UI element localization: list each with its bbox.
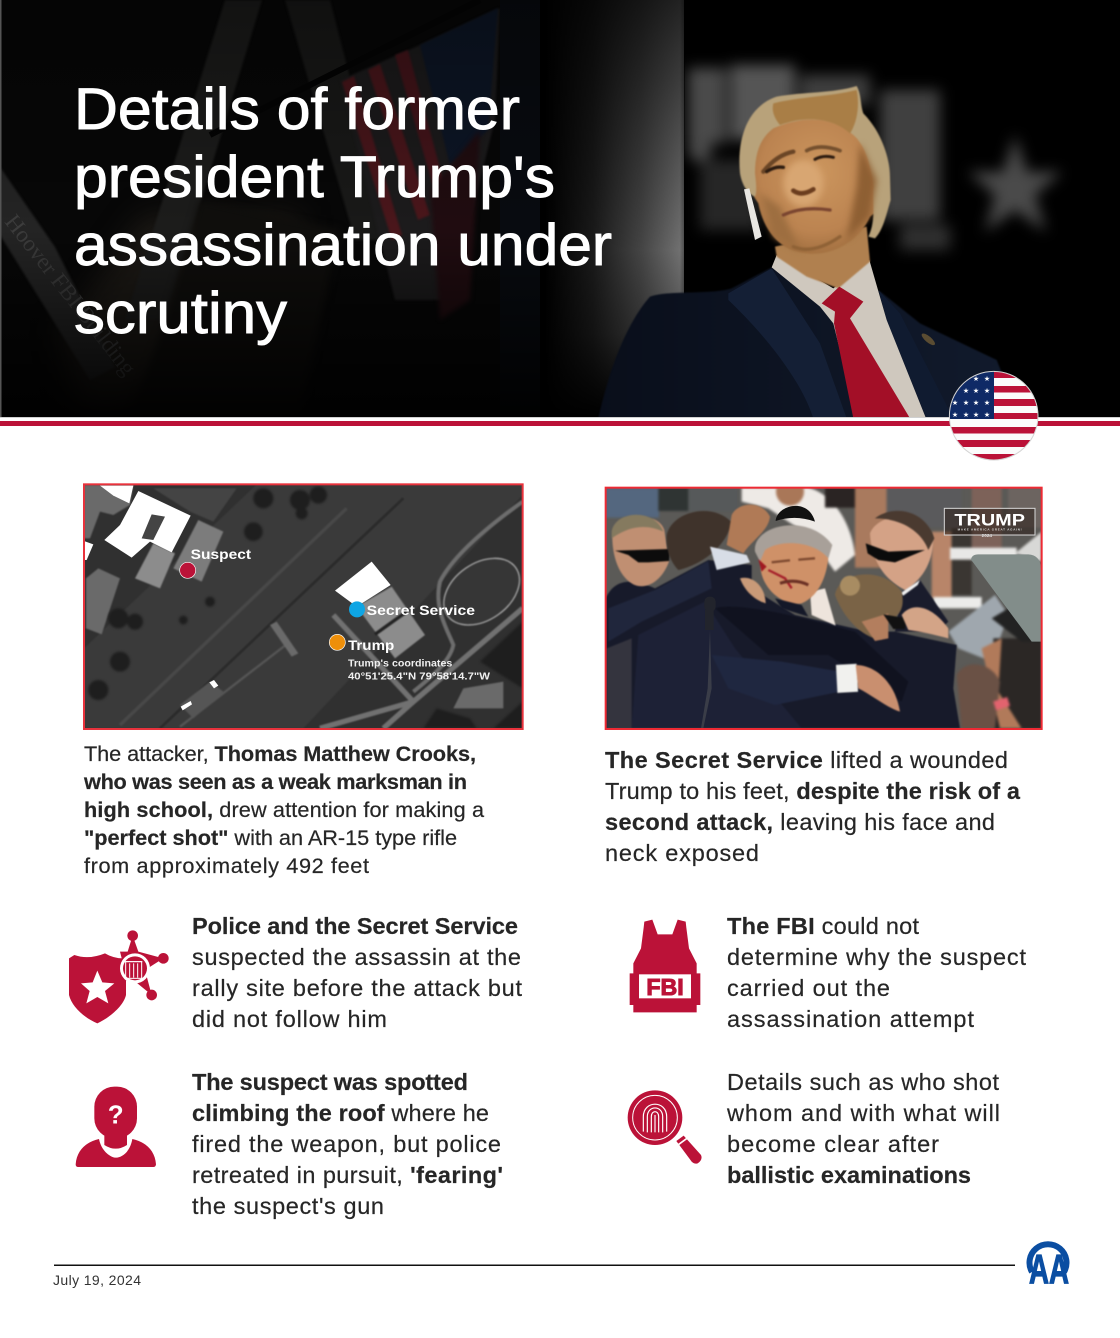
icon: FBI vest: FBI: [646, 974, 684, 1000]
icon: US flag: ★: [952, 399, 958, 407]
title: assassination under: [74, 213, 612, 278]
text block: police: Police and the Secret Service: [192, 913, 518, 939]
left agent head: [612, 515, 670, 586]
black hat behind head: [776, 506, 815, 522]
date: July 19, 2024: [53, 1272, 141, 1288]
marker: suspect: [180, 547, 252, 578]
figure: former president Trump: [598, 86, 1020, 418]
icon: US flag: ★: [973, 375, 979, 383]
text block: attacker: [83, 741, 485, 878]
text block: FBI: carried out the: [727, 975, 890, 1001]
microphone: [701, 597, 716, 728]
campaign logo: 2024: [982, 533, 992, 538]
text block: suspect spotted: climbing the roof where he: [192, 1100, 489, 1126]
logo: Anadolu Agency: [1029, 1244, 1069, 1292]
icon: US flag: ★: [973, 411, 979, 419]
text block: secret service: second attack, leaving his face and: [605, 809, 995, 835]
brows, eyes, nose and mouth: [763, 147, 840, 249]
panel: rally photo: [606, 478, 1042, 729]
facial shading: [760, 143, 877, 252]
text block: ballistic: ballistic examinations: [727, 1162, 971, 1188]
icon: suspect silhouette with question mark: ?: [108, 1099, 124, 1129]
text block: police: suspected the assassin at the: [192, 944, 521, 970]
building and flag backdrop: Hoover FBI Building: [0, 210, 141, 381]
text block: secret service: The Secret Service lifted a wounded: [605, 747, 1008, 773]
crowd background: [606, 478, 1042, 729]
text block: suspect spotted: The suspect was spotted: [192, 1069, 468, 1095]
icon: US flag: ★: [984, 399, 990, 407]
tie: [822, 287, 910, 418]
text block: ballistic: [726, 1069, 1000, 1188]
icon: US flag: ★: [984, 375, 990, 383]
marker: secret service: Secret Service: [367, 603, 475, 618]
second agent head and raised fist: [667, 505, 770, 570]
campaign logo: TRUMP: [954, 511, 1025, 530]
marker: Trump and coordinates: Trump's coordinates: [348, 658, 453, 669]
text block: ballistic: whom and with what will: [726, 1100, 1000, 1126]
text block: suspect spotted: the suspect's gun: [192, 1193, 384, 1219]
hair: [739, 86, 891, 238]
text block: suspect spotted: retreated in pursuit, 'fearing': [192, 1162, 503, 1188]
campaign logo: MAKE AMERICA GREAT AGAIN!: [958, 528, 1022, 532]
icon: US flag: ★: [973, 387, 979, 395]
building and flag backdrop: [0, 0, 540, 417]
neck: [775, 227, 870, 288]
marker: Trump and coordinates: 40°51'25.4"N 79°58'14.7"W: [348, 671, 491, 682]
title: scrutiny: [74, 281, 287, 346]
shirt collar: [772, 255, 926, 418]
text block: attacker: high school, drew attention for making a: [84, 797, 485, 822]
head: [739, 86, 891, 254]
icon: US flag: ★: [984, 387, 990, 395]
title: [74, 77, 612, 346]
lapel: [728, 268, 847, 418]
red divider band: [0, 417, 1120, 426]
text block: FBI: assassination attempt: [727, 1006, 974, 1032]
map ground texture and roads: [84, 484, 532, 728]
grey column: [560, 0, 685, 388]
icon: US flag: ★: [973, 399, 979, 407]
text block: FBI: [727, 913, 1026, 1032]
text block: secret service: Trump to his feet, despite the risk of a: [605, 778, 1021, 804]
icon: US flag: ★: [984, 411, 990, 419]
text block: attacker: who was seen as a weak marksman in: [83, 769, 467, 794]
icon: US flag: ★: [963, 411, 969, 419]
icon: US flag: ★: [963, 387, 969, 395]
footer rule: [54, 1264, 1015, 1266]
icon: suspect silhouette with question mark: [76, 1087, 156, 1167]
title: president Trump's: [74, 145, 555, 210]
suit: [598, 267, 1020, 418]
icon: magnifier with fingerprint: [628, 1090, 702, 1164]
marker: Trump and coordinates: Trump: [348, 638, 394, 653]
right agent head: [866, 511, 934, 596]
ear bandage: [744, 188, 762, 240]
icon: US flag: ★: [952, 411, 958, 419]
text block: FBI: determine why the suspect: [727, 944, 1026, 970]
agents in dark suits: [606, 560, 960, 728]
icon: police shield and sheriff star: [69, 930, 169, 1023]
text block: police: rally site before the attack but: [192, 975, 522, 1001]
title: Details of former: [74, 77, 520, 142]
header photo banner: [0, 0, 1120, 418]
text block: FBI: The FBI could not: [727, 913, 919, 939]
icon: US flag: ★: [963, 399, 969, 407]
Trump head: [740, 525, 832, 617]
white roofs: [84, 486, 391, 710]
lapel pin: [922, 334, 935, 346]
panel: aerial map: [84, 484, 532, 729]
text block: police: [192, 913, 522, 1032]
text block: secret service: neck exposed: [605, 840, 759, 866]
marker: secret service: [349, 601, 475, 618]
marker: suspect: Suspect: [191, 547, 252, 562]
text block: suspect spotted: [192, 1069, 503, 1219]
text block: suspect spotted: fired the weapon, but police: [192, 1131, 501, 1157]
trees: [88, 486, 523, 728]
text block: police: did not follow him: [192, 1006, 387, 1032]
logo: Anadolu Agency: AA: [1029, 1246, 1069, 1292]
podium panel: [971, 554, 1041, 642]
text block: ballistic: become clear after: [727, 1131, 939, 1157]
text block: attacker: The attacker, Thomas Matthew Crooks,: [84, 741, 476, 766]
text block: secret service: [605, 747, 1021, 866]
icon: US flag: [949, 371, 1040, 461]
text block: attacker: from approximately 492 feet: [84, 853, 369, 878]
text block: ballistic: Details such as who shot: [727, 1069, 999, 1095]
female agent head and hand: [835, 574, 948, 641]
text block: attacker: "perfect shot" with an AR-15 type rifle: [84, 825, 457, 850]
icon: FBI vest: [630, 920, 700, 1012]
blurred sign and star behind the figure: [688, 65, 1062, 250]
marker: Trump and coordinates: [329, 634, 491, 682]
campaign logo: [944, 508, 1035, 538]
